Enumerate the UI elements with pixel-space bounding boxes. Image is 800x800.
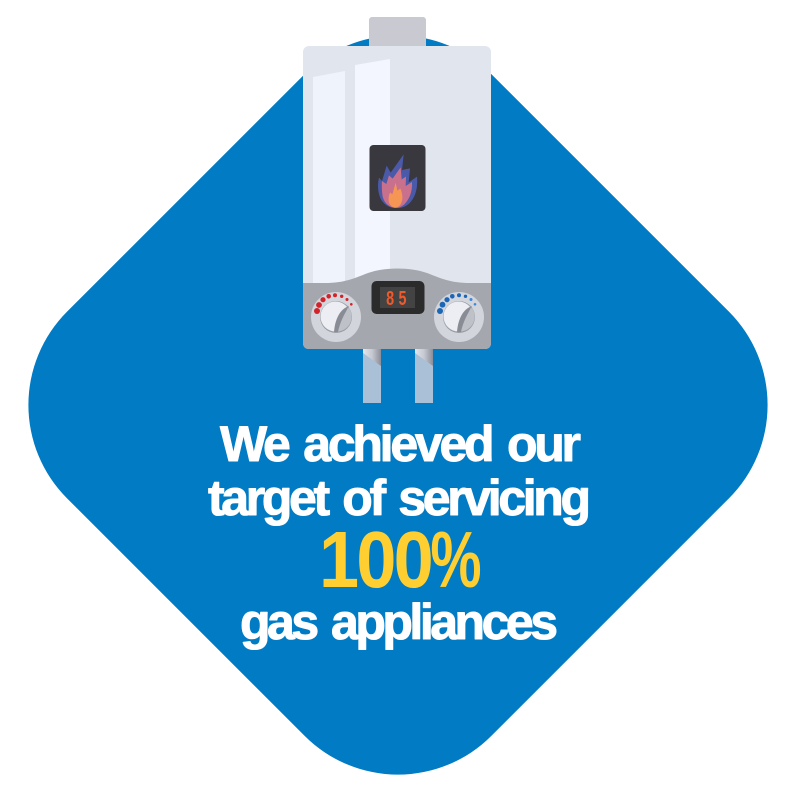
boiler body (303, 46, 491, 349)
right dial: cold (434, 292, 484, 342)
message text (208, 416, 591, 650)
line: We achieved our: We achieved our (220, 416, 581, 472)
stat: 100%: % (430, 515, 482, 604)
icon: flame (378, 154, 417, 208)
display reading: 85 (386, 287, 411, 310)
illustration: wall-mounted gas boiler (303, 17, 491, 403)
left dial: hot (311, 292, 361, 342)
pipes (363, 345, 433, 403)
stat: 100% (319, 515, 482, 605)
flame window (370, 145, 426, 211)
digital display (372, 281, 424, 314)
flue cap (369, 17, 426, 52)
line: gas appliances: gas appliances (240, 594, 558, 650)
control panel (303, 268, 491, 349)
line: target of servicing: target of servicing (208, 470, 591, 526)
stat: 100%: 100 (319, 516, 432, 605)
body highlights (313, 59, 390, 284)
